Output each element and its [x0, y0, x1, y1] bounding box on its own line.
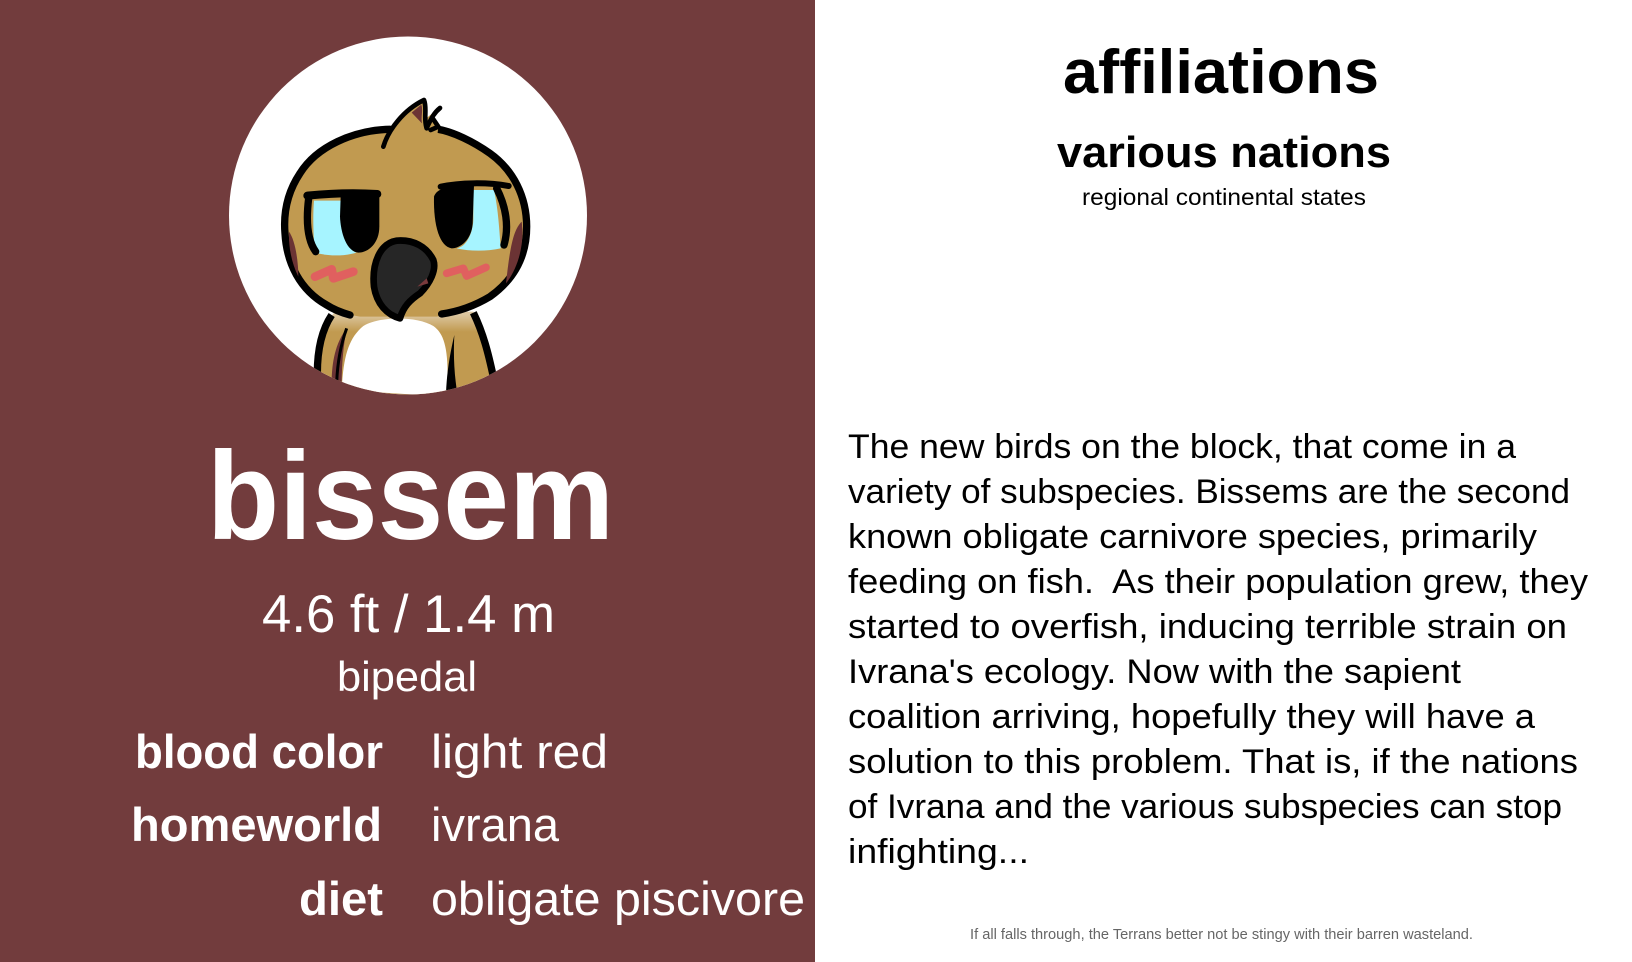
footnote: If all falls through, the Terrans better not be stingy with their barren wasteland. — [970, 926, 1473, 943]
heading: affiliations: affiliations — [1063, 38, 1379, 107]
description text block: coalition arriving, hopefully they will have a — [848, 698, 1535, 736]
attribute: blood color — [135, 725, 608, 778]
description text block — [848, 428, 1588, 871]
description text block: known obligate carnivore species, primarily — [848, 518, 1537, 556]
attribute: blood color: blood color — [135, 725, 383, 778]
attribute: blood color: light red — [431, 725, 608, 778]
description text block: variety of subspecies. Bissems are the second — [848, 473, 1570, 511]
species name: bissem — [207, 427, 614, 566]
description text block: solution to this problem. That is, if the nations — [848, 743, 1578, 781]
affiliation description: regional continental states — [1082, 184, 1366, 210]
attribute: homeworld: homeworld — [131, 798, 382, 851]
description text block: The new birds on the block, that come in a — [848, 428, 1516, 466]
description text block: infighting... — [848, 833, 1029, 871]
attribute: homeworld: ivrana — [431, 798, 560, 851]
height: 4.6 ft / 1.4 m — [262, 585, 555, 644]
description text block: of Ivrana and the various subspecies can stop — [848, 788, 1562, 826]
description text block: started to overfish, inducing terrible strain on — [848, 608, 1567, 646]
locomotion: bipedal — [337, 653, 477, 700]
portrait: bissem bird in white circle — [229, 36, 587, 403]
attribute: diet: diet — [299, 872, 383, 925]
panel: species profile — [0, 0, 815, 962]
attribute: homeworld — [131, 798, 560, 851]
description text block: Ivrana's ecology. Now with the sapient — [848, 653, 1462, 691]
attribute: diet: obligate piscivore — [431, 872, 805, 925]
description text block: feeding on fish. As their population grew, they — [848, 563, 1588, 601]
affiliation name: various nations — [1057, 128, 1391, 177]
